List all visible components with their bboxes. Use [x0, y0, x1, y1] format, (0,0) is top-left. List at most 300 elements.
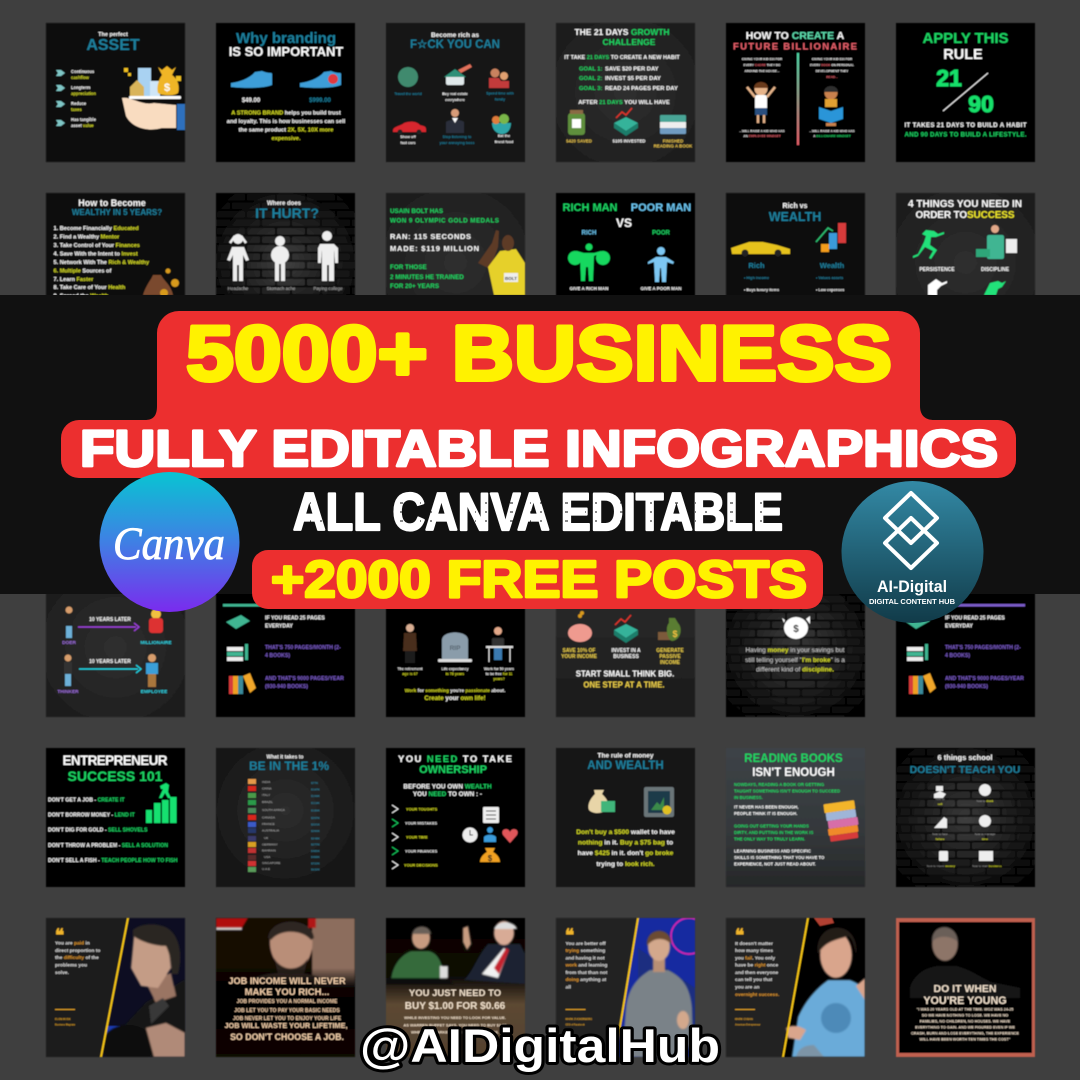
icon: invest cash: [614, 615, 638, 643]
pages text: AND THAT'S 9000 PAGES/YEAR: [945, 676, 1024, 682]
heading: rule of money: [587, 752, 664, 772]
quote: work and learning: [564, 962, 607, 968]
icon: yellow sports car: [731, 242, 790, 256]
banner: dark band: [0, 295, 1080, 594]
branding paragraph: A STRONG BRAND helps you build trust: [231, 110, 341, 116]
asset benefits list: taxes: [71, 107, 82, 112]
captions row two: finest food: [495, 140, 514, 144]
captions: GENERATE: [656, 648, 684, 654]
icon: jar of savings: [568, 110, 585, 135]
goals text: SAVE $20 PER DAY: [605, 66, 659, 72]
photo: man in grey shirt on blue: [614, 918, 707, 1057]
label: years later two: 10 YEARS LATER: [89, 659, 131, 665]
habit text: [904, 122, 1027, 138]
icon: money bag and coins: [143, 268, 179, 297]
quote: you fail. You only: [735, 956, 775, 962]
quote: WILL HAVE BEEN WORTH TEN TIMES THE COST": [920, 1038, 1011, 1042]
logo: Canva: [100, 472, 240, 612]
card: do it when you're young: [895, 917, 1036, 1058]
country names: U.A.E: [262, 867, 270, 871]
subheads: [582, 230, 670, 236]
captions row one: everywhere: [445, 98, 465, 102]
columns: [748, 261, 845, 270]
button: +2000 free posts: [252, 550, 823, 609]
icons and captions: how to: [936, 797, 945, 801]
income column: $197K: [311, 788, 321, 792]
income column: $722K: [311, 862, 321, 866]
heading: wealthy in 5 years: WEALTHY IN 5 YEARS?: [72, 208, 162, 217]
rule text: have $425 in it. don't go broke: [578, 850, 674, 857]
body text: EXPERIENCE, NOT JUST READ ABOUT.: [734, 862, 816, 866]
captions row one: [394, 92, 514, 102]
training lines: FOR THOSE: [390, 264, 427, 271]
captions: is 78 years: [446, 672, 464, 676]
card: How to create a future billionaire: [726, 22, 866, 162]
card: Why branding is so important: [216, 22, 356, 162]
country names: CHINA: [262, 786, 273, 790]
captions: FINISHED: [663, 138, 683, 144]
body text: THE ONLY WAY TO TRULY LEARN.: [734, 836, 805, 842]
quote: all: [566, 984, 572, 990]
handle: @AIDigitalHub: @AIDigitalHub: [360, 1019, 720, 1072]
card: 4 things to succeed: [896, 192, 1036, 295]
icon: bars with climbing figure: [146, 783, 176, 823]
country names: USA: [264, 855, 271, 859]
heading: wealthy in 5 years: [72, 198, 162, 217]
rule text: trying to look rich.: [596, 861, 655, 868]
icon: safe: [644, 787, 674, 817]
captions row one: Buy real estate: [442, 92, 468, 96]
bullets: • Buys luxury items: [744, 288, 779, 292]
labels: DOER: [62, 640, 76, 646]
prices: $49.00: [242, 98, 261, 104]
rules list: [48, 798, 178, 864]
pages text: AND THAT'S 9000 PAGES/YEAR: [265, 676, 344, 682]
heading: 5000+ business: 5000+ BUSINESS: [186, 309, 892, 397]
body text: IT NEVER HAS BEEN ENOUGH,: [734, 804, 798, 810]
captions row two: Eat the: [498, 134, 510, 138]
body text: [734, 782, 840, 866]
body text: DIRTY, AND PUTTING IN THE WORK IS: [734, 830, 813, 835]
rule numbers 21/90: 21: [936, 65, 962, 91]
right column text: EVERY BOOK ON PERSONAL: [810, 63, 854, 67]
earnings: MADE: $119 MILLION: [390, 244, 479, 253]
rules list: DON'T BORROW MONEY - LEND IT: [48, 812, 136, 818]
icon: white piggy bank: $: [793, 624, 799, 635]
icons and captions: [927, 784, 1002, 868]
rules list: DON'T GET A JOB - CREATE IT: [48, 798, 125, 804]
quote: SO WE HAVE NOTHING TO LOSE. WE HAVE NO: [922, 1014, 1008, 1018]
headline: JOB WILL WASTE YOUR LIFETIME,: [225, 1021, 347, 1030]
icon: dollar bag: $: [488, 854, 493, 863]
headline: MAKE YOU RICH...: [245, 987, 329, 998]
heading: ownership: OWNERSHIP: [419, 764, 487, 776]
branding paragraph: [227, 110, 346, 142]
captions: [570, 286, 681, 291]
numbered list: 5. Network With The Rich & Wealthy: [54, 260, 150, 266]
rules list: DON'T DIG FOR GOLD - SELL SHOVELS: [48, 828, 148, 834]
headline: YOU'RE YOUNG: [923, 995, 1007, 1007]
quote: and then everyone: [735, 970, 778, 976]
body text: [403, 1015, 507, 1034]
icon: book stack: [907, 644, 928, 661]
heading: rule of money: AND WEALTH: [587, 760, 664, 772]
photo: sprinter: BOLT: [505, 276, 517, 281]
brand tagline: DIGITAL CONTENT HUB: [869, 597, 956, 606]
card: entrepreneur success 101: [46, 748, 186, 888]
captions: INCOME: [660, 660, 681, 666]
author: [55, 1009, 76, 1026]
captions: SAVE 10% OF: [563, 648, 595, 654]
income column: $221K: [311, 822, 321, 826]
columns: Rich: [748, 261, 765, 270]
card: buy $1 for $0.66: [386, 918, 526, 1057]
icon: green book: [906, 615, 930, 629]
columns: Wealth: [820, 261, 845, 270]
figure: millionaire: [149, 609, 163, 633]
icon: book stack: [227, 644, 248, 661]
card: start small: [556, 609, 696, 718]
captions: [919, 267, 1010, 273]
captions: Headache: [228, 286, 249, 291]
heading: rich vs poor: POOR MAN: [631, 202, 691, 214]
card: Zuckerberg quote: [556, 917, 696, 1058]
icon: passive income bag: $: [672, 629, 678, 639]
accent bar: [946, 604, 1025, 606]
subheading panel: fully editable infographics: [61, 420, 1016, 478]
heading: rich vs wealth: [769, 203, 821, 224]
heading: become rich: [410, 32, 500, 51]
quote: have be right once: [735, 962, 779, 968]
country names: UK: [264, 836, 269, 840]
earnings: RAN: 115 SECONDS: [390, 232, 471, 241]
income column: $119K: [311, 801, 321, 805]
training lines: FOR 20+ YEARS: [390, 283, 439, 290]
numbered list: 7. Learn Faster: [54, 277, 94, 283]
habit text: AND 90 DAYS TO BUILD A LIFESTYLE.: [904, 132, 1027, 138]
author: Business Magnate: [55, 1024, 76, 1026]
intro text: YOU NEED TO OWN : -: [413, 791, 482, 798]
heading: branding: IS SO IMPORTANT: [229, 44, 343, 59]
captions: age is 67: [402, 672, 418, 676]
captions row two: [400, 134, 514, 145]
quote marks: ❝: [735, 926, 744, 945]
heading: 1%: BE IN THE 1%: [249, 759, 329, 773]
card: retirement scam: [386, 593, 526, 718]
icon: bag with cash: [588, 790, 615, 813]
card: reading books isn't enough: [726, 752, 865, 887]
income column: $260K: [311, 829, 321, 833]
heading: rich vs poor: [562, 202, 691, 230]
headline: [225, 976, 347, 1042]
left column text: EVERY CHORE THEY DO: [744, 63, 781, 67]
figure: stomach ache: [271, 236, 289, 281]
body text: GOING OUT GETTING YOUR HANDS: [734, 824, 809, 828]
ownership list: YOUR TOUGHTS: [406, 806, 438, 812]
quote: how many times: [735, 948, 773, 954]
heading: become rich: Become rich as: [431, 32, 479, 39]
quote: from that than not: [566, 970, 608, 976]
country names: AUSTRALIA: [262, 828, 280, 832]
branding paragraph: expensive.: [271, 136, 301, 142]
fade overlay: [216, 918, 355, 1057]
heading: 4 things: ORDER TOSUCCESS: [916, 210, 1015, 221]
heading: future billionaire: HOW TO CREATE A: [746, 30, 845, 42]
numbered list: 6. Multiple Sources of: [54, 268, 111, 274]
heading: 4 things: [908, 199, 1022, 221]
pages text: IF YOU READ 25 PAGES: [945, 616, 1005, 622]
country names: BRAZIL: [262, 800, 273, 804]
subheads: POOR: [652, 230, 670, 236]
country names: ITALY: [262, 793, 270, 797]
captions row one: Spend time with: [486, 92, 514, 96]
author: [566, 1009, 592, 1026]
right column text: [809, 57, 855, 138]
heading: become rich: F☆CK YOU CAN: [410, 38, 500, 51]
icon: gravestone: RIP: [450, 645, 461, 652]
card: Usain Bolt: [386, 192, 526, 295]
figure: standing person: [318, 231, 338, 281]
pages text: (930-940 BOOKS): [265, 684, 308, 690]
body text: SKILLS IS SOMETHING THAT YOU HAVE TO: [734, 855, 825, 860]
pages text: IF YOU READ 25 PAGES: [265, 616, 325, 622]
heading: apply this rule: [922, 30, 1008, 63]
income column: $485K: [311, 849, 321, 853]
heading: apply this rule: APPLY THIS: [922, 30, 1008, 47]
button text: +2000 FREE POSTS: [271, 551, 807, 609]
country names: FRANCE: [262, 822, 275, 826]
asset benefits list: cashflow: [71, 75, 90, 80]
captions: GIVE A POOR MAN: [641, 286, 681, 291]
quote: [55, 940, 100, 976]
subheading text: FULLY EDITABLE INFOGRAPHICS: [80, 420, 998, 477]
icon: blue shoe plain: [231, 71, 272, 88]
card: Rich man vs poor man: [556, 192, 696, 295]
icon: linked diamonds: [885, 493, 937, 568]
prices: [242, 98, 332, 104]
rule numbers 21/90: 90: [968, 91, 994, 117]
heading: growth challenge: [574, 27, 670, 47]
captions: $420 SAVED: [566, 138, 592, 144]
goals text: GOAL 3:: [579, 86, 602, 92]
headline: [405, 988, 506, 1012]
chevrons: [392, 805, 398, 869]
heading: future billionaire: [733, 30, 857, 52]
captions: INVEST IN A: [611, 648, 641, 654]
heading: rich vs wealth: WEALTH: [769, 210, 821, 224]
icon: growing bar chart: [816, 223, 846, 252]
photo: man portrait: [216, 918, 355, 998]
card: Where does it hurt: [216, 192, 356, 295]
captions: Work for 50 years: [484, 667, 514, 671]
rule text: [576, 829, 675, 868]
heading: perfect asset: ASSET: [86, 37, 140, 54]
heading: perfect asset: The perfect: [98, 32, 128, 38]
labels: THINKER: [57, 689, 79, 695]
quote: You are better off: [566, 941, 606, 947]
captions row two: Show off: [400, 135, 417, 139]
goals text: AFTER 21 DAYS YOU WILL HAVE: [578, 100, 670, 106]
tagline: [576, 670, 674, 690]
icons and captions: how to start business: [972, 864, 1002, 868]
quote: FAMILIES, NO CHILDREN, NO HOUSES. WE HAVE: [920, 1020, 1011, 1024]
body text: NOWDAYS, READING A BOOK OR GETTING: [734, 782, 825, 787]
country names: CANADA: [262, 816, 276, 820]
training lines: 2 MINUTES HE TRAINED: [390, 274, 464, 281]
quote: It doesn't matter: [735, 941, 773, 947]
income column: $207K: [311, 816, 321, 820]
captions: Paying college: [313, 286, 343, 291]
pages text: THAT'S 750 PAGES/MONTH (2-: [945, 645, 1021, 651]
asset benefits list: asset value: [71, 123, 94, 128]
accent bar: [223, 604, 283, 606]
icon: stack of books: [823, 800, 860, 842]
heading: ownership: [398, 754, 512, 776]
headline: YOU JUST NEED TO: [409, 988, 501, 999]
figure: headache: [227, 234, 249, 281]
icon: discipline woman at laptop: [976, 225, 1017, 259]
heading: it hurt: Where does: [267, 201, 302, 207]
asset benefits list: [56, 69, 97, 128]
right column text: GIVING YOUR KID $10 FOR: [812, 57, 853, 61]
intro text: BEFORE YOU OWN WEALTH: [403, 784, 492, 790]
country names: GERMANY: [262, 842, 278, 846]
author: MARK CUBAN: [735, 1017, 753, 1021]
earnings: [390, 232, 479, 253]
captions: [561, 648, 684, 666]
asset benefits list: Continuous: [71, 69, 95, 74]
headline: [923, 983, 1007, 1007]
labels: EMPLOYEE: [141, 689, 168, 695]
captions: BUSINESS: [613, 654, 639, 660]
quote: You are paid in: [55, 940, 90, 946]
captions: Life expectancy: [442, 667, 468, 671]
captions: [566, 138, 693, 148]
captions row two: fast cars: [400, 141, 416, 145]
goals text: INVEST $5 PER DAY: [605, 76, 661, 82]
country names: INDIA: [262, 780, 271, 784]
right column text: READ...: [826, 75, 838, 79]
labels: MILLIONAIRE: [140, 640, 172, 646]
pages text: EVERYDAY: [945, 624, 973, 630]
captions row one: family: [495, 98, 505, 102]
headline: JOB PROVIDES YOU A NORMAL INCOME: [237, 999, 338, 1005]
icon: colourful books: [229, 673, 256, 694]
quote: EVERYTHING TO GAIN. AND WE FIGURED EVEN IF WE: [915, 1026, 1015, 1030]
conclusion text: Create your own life!: [424, 695, 486, 702]
icon: worker at desk: [486, 627, 513, 662]
icon: reading boy: [819, 86, 843, 126]
heading: Bolt medals: WON 9 OLYMPIC GOLD MEDALS: [390, 218, 499, 224]
heading: ownership: YOU NEED TO TAKE: [398, 754, 512, 765]
ownership list: YOUR DECISIONS: [404, 862, 438, 868]
captions: DISCIPLINE: [981, 267, 1010, 273]
arrow: purple: [78, 623, 139, 631]
tagline: all canva editable: ALL CANVA EDITABLE: [293, 483, 783, 542]
heading: entrepreneur: ENTREPRENEUR: [62, 753, 168, 768]
card: The perfect asset: [46, 22, 186, 162]
icons row two: [393, 109, 511, 134]
headline: BUY $1.00 FOR $0.66: [405, 1001, 506, 1012]
habit text: IT TAKES 21 DAYS TO BUILD A HABIT: [904, 122, 1027, 129]
quote text: [745, 647, 845, 674]
icons and captions: how to think: [977, 799, 994, 803]
icons and captions: how to manage: [975, 832, 996, 836]
icons row one: [398, 64, 509, 88]
bullets: • Low expenses: [816, 288, 844, 292]
heading: 4 things: 4 THINGS YOU NEED IN: [908, 199, 1022, 210]
author: CEO of Facebook: [566, 1024, 585, 1026]
captions: Stomach ache: [267, 286, 296, 291]
accent line: [100, 918, 129, 1057]
headline: DO IT WHEN: [934, 983, 996, 995]
ownership list: YOUR MISTAKES: [405, 820, 438, 826]
icons bottom: [928, 279, 1006, 296]
heading: branding: [229, 30, 343, 59]
country names: [262, 780, 286, 871]
ownership list: YOUR FINANCES: [405, 848, 438, 854]
captions: The retirement: [398, 667, 423, 671]
rule text: nothing in it. Buy a $75 bag to: [578, 840, 673, 846]
card: Become rich as F*ck you can: [386, 22, 526, 162]
country names: BAHRAIN: [262, 848, 276, 852]
numbered list: 4. Save With the Intent to Invest: [54, 252, 138, 258]
card: Mark Cuban quote: [726, 917, 866, 1058]
pages text: [945, 616, 1024, 690]
left column text: [739, 57, 785, 138]
card: 21 days growth challenge: [556, 22, 696, 162]
conclusion text: [405, 688, 505, 702]
quote: the difficulty of the: [55, 955, 99, 961]
country names: SINGAPORE: [262, 861, 280, 865]
quote: [911, 1008, 1019, 1042]
captions: PERSISTENCE: [919, 267, 955, 273]
heading panel: 5000+ business: [145, 309, 934, 420]
brand name: AI-Digital: [877, 577, 947, 596]
photo: two investors seated: [386, 921, 525, 984]
intro text: [403, 784, 492, 798]
card: Apply this rule: [896, 22, 1036, 162]
quote: solve.: [55, 970, 70, 976]
card: rule of money and wealth: [556, 748, 696, 888]
body text: WHILE INVESTING YOU NEED TO LOOK FOR VALUE.: [404, 1015, 506, 1020]
right column text: A BILLIONAIRE MINDSET: [813, 134, 851, 138]
heading: growth challenge: CHALLENGE: [603, 37, 656, 47]
heading: future billionaire: FUTURE BILLIONAIRE: [733, 42, 857, 52]
icon: piggy bank: [568, 611, 592, 642]
captions: PASSIVE: [659, 654, 681, 660]
goals text: GOAL 1:: [579, 66, 602, 72]
figure: rich with money bags: [568, 244, 610, 281]
quote marks: ❝: [565, 926, 574, 945]
body text: WHEN THE MARKET PRICES IT AT FOR $0.66.: [411, 1030, 499, 1034]
captions: [228, 286, 343, 291]
heading: school: [910, 753, 1020, 776]
asset benefits list: appreciation: [71, 91, 96, 96]
captions row one: Travel the world: [394, 92, 422, 96]
photo: man in black turtleneck: [910, 927, 1020, 998]
heading: growth challenge: THE 21 DAYS GROWTH: [574, 27, 670, 37]
quote: [564, 941, 608, 990]
left column text: AROUND THE HOUSE...: [744, 69, 780, 73]
heading: it hurt: IT HURT?: [255, 205, 319, 221]
card: Rich vs wealth: [726, 192, 866, 295]
asset benefits list: Reduce: [71, 101, 87, 106]
right column text: DEVELOPMENT THEY: [816, 69, 849, 73]
logo: AI-Digital: [842, 481, 984, 623]
body text: TAUGHT SOMETHING ISN'T ENOUGH TO SUCCEED: [734, 788, 840, 794]
figure: doer: [65, 606, 73, 638]
